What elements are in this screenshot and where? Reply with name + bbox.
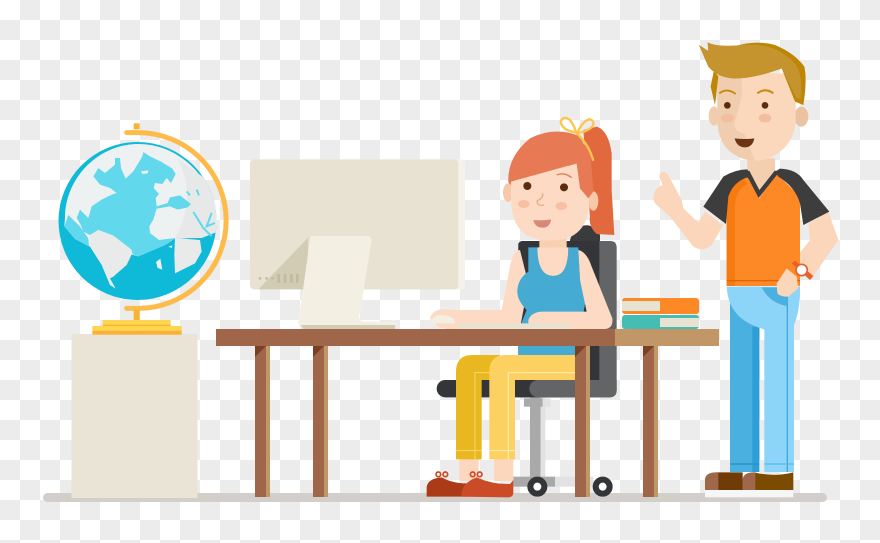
ears bbox=[709, 106, 808, 127]
trousers bbox=[727, 287, 800, 472]
shirt shade bbox=[727, 177, 747, 286]
wheels bbox=[530, 480, 610, 494]
front leg seam bbox=[489, 373, 575, 459]
eyes bbox=[523, 182, 568, 191]
head hair bbox=[508, 132, 593, 200]
pale land highlight bbox=[64, 144, 218, 256]
Atlantic ocean bbox=[77, 152, 191, 257]
bottom book bbox=[622, 315, 699, 329]
hair bbox=[699, 42, 801, 98]
right arm bbox=[528, 250, 612, 329]
back shoe bbox=[427, 477, 470, 497]
other arm bbox=[790, 212, 838, 278]
post bbox=[513, 397, 593, 487]
tank top bbox=[517, 247, 586, 350]
hems bbox=[730, 463, 794, 465]
back leg bbox=[456, 355, 500, 459]
sideburn bbox=[711, 70, 718, 105]
right heel bbox=[743, 472, 755, 490]
keyboard bbox=[459, 323, 570, 329]
top book bbox=[622, 298, 699, 314]
face bbox=[717, 73, 796, 161]
left heel bbox=[705, 472, 718, 490]
desk top side bbox=[615, 329, 719, 346]
Greenland gap and Iceland bbox=[141, 170, 148, 174]
far side shading bbox=[175, 158, 218, 238]
seam bbox=[785, 295, 789, 472]
left leg stripe bbox=[752, 327, 759, 472]
mouth bbox=[735, 138, 754, 147]
desk legs bbox=[255, 346, 658, 497]
ponytail bbox=[583, 127, 614, 235]
monitor stand bbox=[298, 236, 395, 328]
hand on hip bbox=[777, 268, 798, 297]
vents bbox=[259, 274, 299, 283]
globe sphere bbox=[58, 142, 216, 300]
Madagascar and islands bbox=[156, 245, 172, 270]
floor line bbox=[43, 493, 827, 502]
stand arm bbox=[127, 133, 226, 308]
stand pins and base bbox=[92, 123, 182, 335]
mouse bbox=[431, 315, 455, 323]
chest skin bbox=[537, 247, 568, 276]
seat bbox=[437, 380, 570, 397]
Africa bbox=[174, 238, 202, 273]
socks bbox=[459, 459, 513, 481]
Indian ocean fragments bbox=[187, 190, 215, 236]
right sleeve bbox=[775, 169, 829, 225]
brows and nose bbox=[521, 172, 572, 205]
mouth bbox=[533, 219, 551, 228]
left shoe bbox=[705, 472, 743, 490]
pedestal bbox=[72, 334, 198, 498]
computer monitor bbox=[250, 159, 465, 329]
woman bbox=[427, 118, 614, 497]
watch bbox=[792, 261, 813, 280]
eyes bbox=[724, 102, 768, 109]
South America bbox=[90, 230, 132, 289]
soles bbox=[705, 490, 793, 497]
stand shadow bbox=[258, 237, 308, 289]
front leg bbox=[489, 355, 575, 459]
desk bbox=[216, 329, 719, 497]
shirt hem bbox=[727, 280, 800, 281]
cheeks bbox=[518, 200, 567, 210]
face bbox=[511, 163, 589, 241]
left sleeve bbox=[703, 169, 759, 224]
Pacific ocean bbox=[64, 215, 89, 247]
monitor side bbox=[440, 159, 465, 289]
office chair bbox=[437, 225, 617, 494]
headrest bbox=[570, 225, 600, 243]
left leg bbox=[730, 303, 759, 472]
monitor back bbox=[250, 159, 458, 289]
seat front bbox=[529, 380, 617, 397]
stand base shade bbox=[301, 325, 395, 329]
left arm bbox=[430, 250, 528, 328]
chair back bbox=[518, 241, 617, 397]
fringe bbox=[508, 137, 593, 198]
neck bbox=[539, 233, 567, 253]
back leg seam bbox=[456, 373, 489, 459]
woman's legs and shoes bbox=[427, 343, 576, 497]
neck bbox=[747, 158, 775, 195]
right shoe bbox=[743, 472, 793, 490]
globe bbox=[58, 142, 218, 300]
torso below desk bbox=[518, 343, 576, 357]
shoe bows bbox=[436, 472, 482, 477]
right leg and hips bbox=[727, 287, 800, 472]
shirt bbox=[727, 173, 800, 286]
hair dark edge bbox=[699, 42, 806, 105]
ribbon bbox=[561, 118, 593, 161]
cheeks bbox=[721, 114, 771, 122]
globe stand bbox=[92, 123, 226, 335]
ears bbox=[503, 183, 598, 211]
books bbox=[622, 298, 699, 329]
hand on mouse bbox=[442, 324, 463, 329]
pocket bbox=[762, 287, 787, 306]
collar bbox=[747, 172, 777, 194]
front shoe bbox=[461, 477, 513, 497]
chair back dark bbox=[518, 241, 599, 380]
face shadow bbox=[717, 73, 755, 161]
shoes bbox=[705, 472, 793, 497]
man bbox=[653, 42, 838, 497]
brows bbox=[719, 90, 773, 94]
woman's upper body bbox=[430, 118, 614, 350]
desk top front bbox=[216, 329, 615, 346]
raised arm bbox=[653, 172, 723, 249]
man's upper body bbox=[653, 42, 838, 297]
